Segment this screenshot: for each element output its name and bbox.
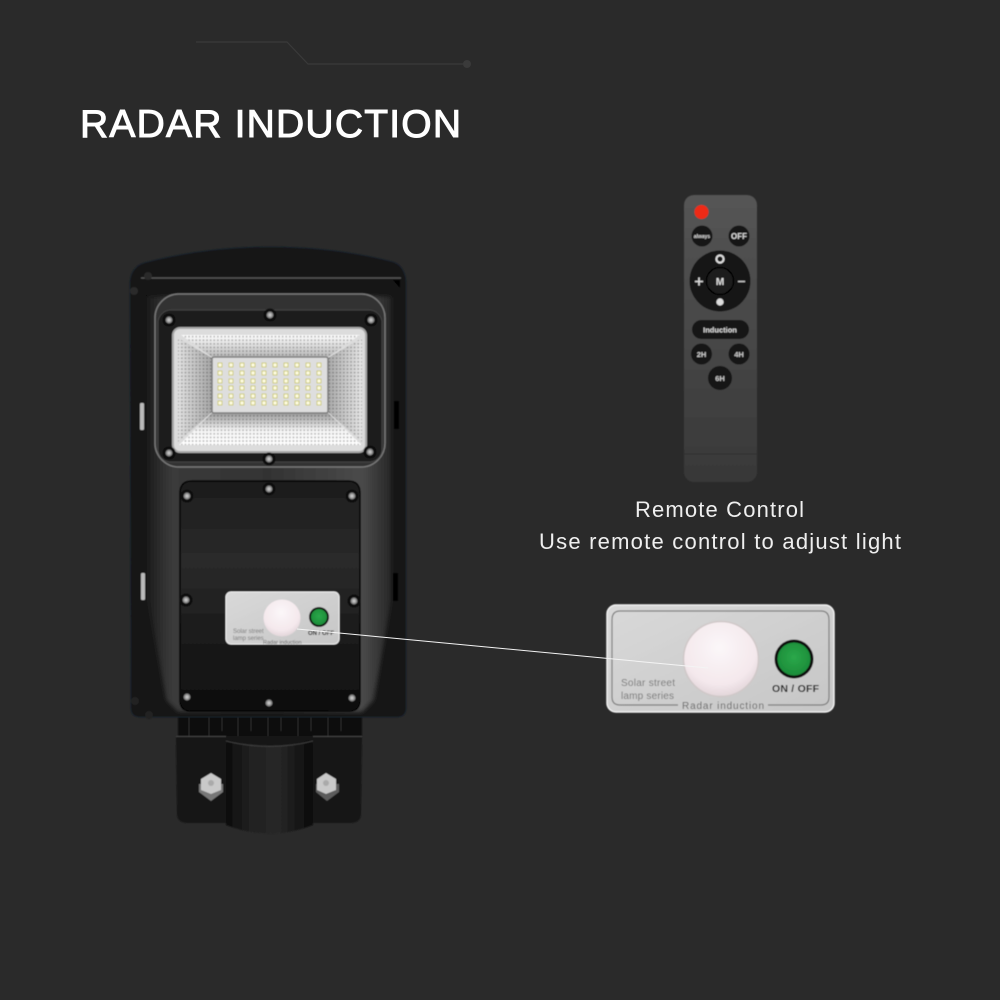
title: RADAR INDUCTION [80, 103, 461, 146]
4H button: 4H [734, 350, 744, 359]
battery cover panel [180, 481, 360, 711]
remote caption: Use remote control to adjust light [539, 529, 901, 554]
LED module frame [155, 294, 385, 467]
remote control [684, 195, 757, 482]
enlarged radar sensor plate [607, 605, 834, 712]
remote caption [539, 497, 901, 554]
street lamp [130, 247, 406, 834]
always button: always [694, 234, 710, 240]
lamp mounting fins [178, 715, 362, 739]
4H button [728, 344, 750, 364]
induction button [692, 320, 749, 339]
sensor dome [684, 622, 758, 696]
lamp housing [130, 247, 406, 719]
2H button [691, 344, 712, 364]
remote caption: Remote Control [635, 497, 804, 522]
callout leader line [297, 629, 708, 668]
plate small text [621, 678, 764, 712]
on/off label: ON / OFF [772, 683, 820, 695]
decorative circuit line [196, 42, 471, 68]
directional pad: M [716, 277, 724, 288]
directional pad [690, 250, 750, 312]
remote body [684, 195, 757, 482]
6H button [708, 366, 732, 390]
LED array [212, 357, 328, 413]
green on/off button [774, 640, 814, 678]
always button [692, 226, 712, 246]
small radar sensor plate: ON / OFF [308, 631, 334, 637]
6H button: 6H [715, 374, 725, 383]
small radar sensor plate [226, 592, 339, 646]
plate body [607, 605, 834, 712]
LED frame screws [162, 308, 378, 466]
small radar sensor plate: Radar induction [263, 640, 302, 646]
2H button: 2H [697, 350, 706, 359]
off button: OFF [731, 232, 747, 241]
small radar sensor plate: Solar street [233, 629, 264, 635]
LED glass and reflector [173, 328, 366, 452]
red power button [694, 205, 708, 219]
bracket bolts [199, 773, 339, 801]
plate small text: lamp series [621, 691, 674, 702]
off button [728, 226, 750, 246]
lamp mounting bracket [176, 736, 362, 834]
plate small text: Solar street [621, 678, 675, 689]
induction button: Induction [703, 326, 737, 334]
small radar sensor plate: lamp series [233, 636, 264, 642]
plate small text: Radar induction [682, 701, 764, 712]
